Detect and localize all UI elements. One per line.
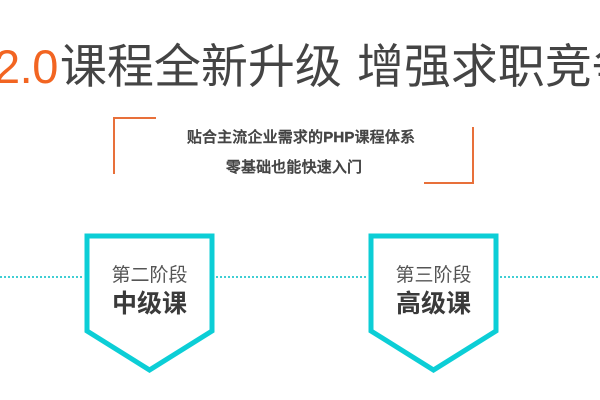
dotted timeline	[0, 276, 598, 278]
stage 2 label: 第二阶段	[111, 265, 188, 286]
stage 3 badge	[368, 234, 498, 373]
stage 2 badge	[84, 234, 214, 373]
stage 2 shield outline	[84, 234, 214, 373]
stage 2 name: 中级课	[112, 290, 187, 318]
stage 3 name: 高级课	[396, 290, 471, 318]
subtitle line 2: 零基础也能快速入门	[226, 159, 362, 176]
subtitle line 1: 贴合主流企业需求的PHP课程体系	[187, 129, 415, 146]
subtitle text	[187, 128, 415, 176]
stage 3 shield outline	[368, 234, 498, 373]
stage 3 label: 第三阶段	[395, 265, 472, 286]
